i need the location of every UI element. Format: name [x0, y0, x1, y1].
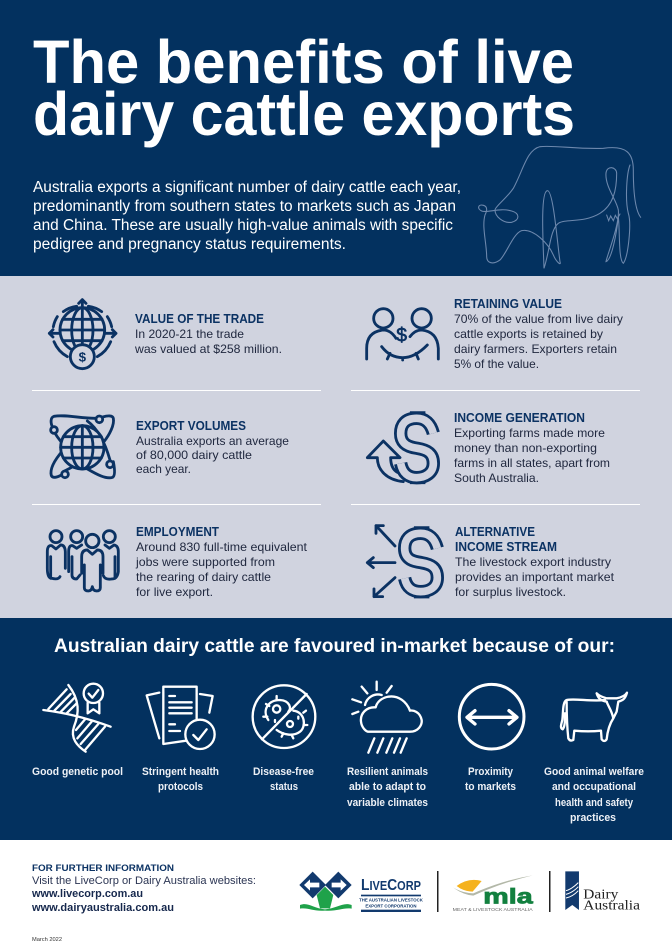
- label: health protocols: protocols: [158, 781, 203, 793]
- label: animal welfare: Good animal welfare: [544, 766, 644, 778]
- label: animal welfare: [544, 766, 644, 824]
- panel: footer information: March 2022: [32, 937, 62, 943]
- text: retaining value: 5% of the value.: [454, 357, 539, 371]
- icon: cow: [561, 693, 627, 741]
- icon: globe with dollar: $: [79, 349, 87, 364]
- logo: Dairy Australia: Dairy: [583, 888, 618, 903]
- title: The benefits of live: [33, 28, 574, 96]
- text: income generation: South Australia.: [454, 471, 539, 485]
- icon: handshake with dollar: $: [396, 326, 407, 347]
- label: resilient animals: able to adapt to: [349, 781, 426, 793]
- label: health protocols: Stringent health: [142, 766, 219, 778]
- panel: footer information: www.dairyaustralia.com.au: [31, 902, 174, 914]
- intro text: pedigree and pregnancy status requirements.: [33, 236, 346, 253]
- icon: globe with dollar: [49, 300, 116, 369]
- label: proximity: [465, 766, 516, 793]
- text: export volumes: EXPORT VOLUMES: [136, 419, 246, 433]
- icon: no germs: [253, 685, 315, 748]
- text: retaining value: 70% of the value from live dairy: [454, 312, 623, 326]
- text: value of the trade: In 2020-21 the trade: [135, 327, 244, 341]
- intro text: and China. These are usually high-value animals with specific: [33, 217, 453, 234]
- text: employment: jobs were supported from: [135, 555, 275, 569]
- text: income generation: farms in all states, apart from: [454, 456, 610, 470]
- heading: Australian dairy cattle are favoured in-market because of our:: [54, 636, 615, 657]
- text: value of the trade: was valued at $258 million.: [134, 342, 282, 356]
- title: [33, 28, 575, 148]
- label: proximity: Proximity: [468, 766, 514, 778]
- text: alternative income stream: ALTERNATIVE: [455, 525, 535, 539]
- text: employment: [135, 525, 308, 599]
- logo: Dairy Australia: Australia: [583, 899, 641, 914]
- panel: favoured in-market: [0, 618, 672, 840]
- intro text: predominantly from southern states to markets such as Japan: [33, 198, 456, 215]
- icon: globe with orbits: [51, 416, 114, 478]
- text: income generation: money than non-exporting: [454, 441, 597, 455]
- icon: sun, cloud and rain: [352, 682, 422, 753]
- panel: key facts: [0, 276, 672, 618]
- text: value of the trade: [134, 312, 282, 356]
- label: proximity: to markets: [465, 781, 516, 793]
- panel: header: [0, 0, 672, 276]
- logo: LiveCorp: EXPORT CORPORATION: [365, 904, 417, 909]
- icon: dna with badge: [43, 684, 111, 752]
- label: disease-free: Disease-free: [253, 766, 314, 778]
- text: alternative income stream: The livestock export industry: [455, 555, 611, 569]
- logo: LiveCorp: THE AUSTRALIAN LIVESTOCK: [359, 898, 424, 903]
- label: animal welfare: practices: [570, 812, 616, 824]
- text: export volumes: of 80,000 dairy cattle: [136, 448, 252, 462]
- logo: MLA: MEAT & LIVESTOCK AUSTRALIA: [453, 907, 533, 913]
- logo: Dairy Australia: [565, 871, 641, 914]
- text: export volumes: each year.: [136, 462, 191, 476]
- text: employment: the rearing of dairy cattle: [136, 570, 271, 584]
- text: alternative income stream: for surplus livestock.: [455, 585, 566, 599]
- text: retaining value: dairy farmers. Exporters retain: [454, 342, 617, 356]
- text: alternative income stream: INCOME STREAM: [455, 540, 557, 554]
- panel: footer information: Visit the LiveCorp or Dairy Australia websites:: [32, 875, 256, 887]
- text: value of the trade: VALUE OF THE TRADE: [135, 312, 264, 326]
- logo: LiveCorp: [299, 872, 424, 912]
- text: income generation: INCOME GENERATION: [454, 411, 585, 425]
- intro text: Australia exports a significant number of dairy cattle each year,: [33, 179, 461, 196]
- text: retaining value: [454, 297, 623, 371]
- label: genetic pool: Good genetic pool: [32, 766, 123, 778]
- text: alternative income stream: [455, 525, 615, 599]
- label: resilient animals: variable climates: [347, 797, 428, 809]
- text: retaining value: cattle exports is retained by: [454, 327, 603, 341]
- text: income generation: [454, 411, 610, 485]
- panel: footer information: [31, 863, 256, 943]
- text: employment: EMPLOYMENT: [136, 525, 219, 539]
- text: alternative income stream: provides an important market: [455, 570, 615, 584]
- icon: documents with check: [147, 687, 215, 749]
- icon: group of people: [47, 531, 118, 591]
- icon: double arrow in circle: [459, 684, 524, 749]
- label: health protocols: [142, 766, 219, 793]
- panel: footer information: FOR FURTHER INFORMATION: [32, 863, 174, 874]
- logo: LiveCorp: LIVECORP: [361, 877, 421, 894]
- title: dairy cattle exports: [33, 80, 575, 148]
- icon: dollar with return arrow: [367, 413, 433, 483]
- icon: cow line drawing: [479, 146, 641, 268]
- label: resilient animals: Resilient animals: [347, 766, 428, 778]
- label: resilient animals: [347, 766, 428, 809]
- text: export volumes: Australia exports an average: [136, 434, 289, 448]
- label: animal welfare: and occupational: [552, 781, 636, 793]
- panel: footer information: www.livecorp.com.au: [31, 888, 143, 900]
- text: export volumes: [136, 419, 289, 476]
- icon: handshake with dollar: [367, 309, 438, 360]
- label: animal welfare: health and safety: [555, 797, 634, 809]
- logo: MLA: [453, 875, 533, 913]
- label: disease-free: [253, 766, 314, 793]
- icon: dollar with outgoing arrows: [367, 526, 437, 597]
- text: retaining value: RETAINING VALUE: [454, 297, 562, 311]
- label: disease-free: status: [270, 781, 298, 793]
- text: employment: for live export.: [136, 585, 213, 599]
- text: employment: Around 830 full-time equivalent: [136, 540, 308, 554]
- intro text: [33, 179, 461, 253]
- text: income generation: Exporting farms made more: [454, 426, 605, 440]
- logo: MLA: mla: [483, 884, 533, 908]
